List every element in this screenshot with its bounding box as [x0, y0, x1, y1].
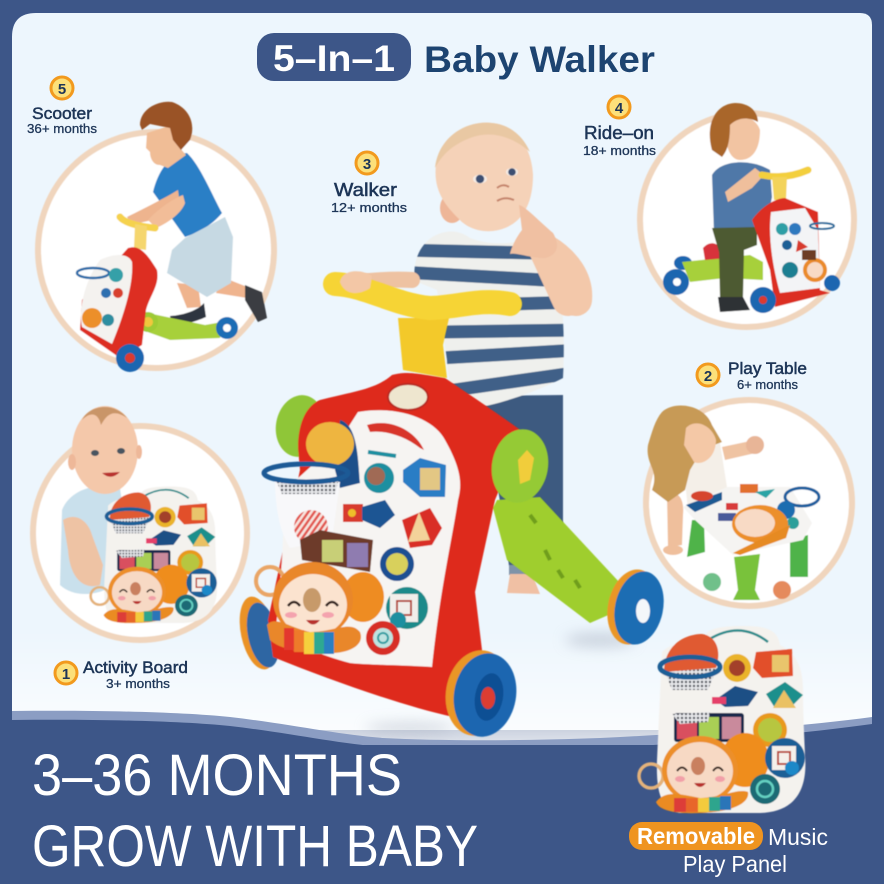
activity board age: 3+ months: [106, 676, 171, 691]
spiral wheel: [366, 621, 400, 655]
panel: activity board circle: [33, 406, 247, 640]
walker name: Walker: [334, 180, 397, 200]
left green cylinder: [271, 391, 329, 461]
floor highlight: [12, 630, 872, 745]
helicopter toy: [364, 452, 396, 493]
monkey head: [273, 562, 353, 638]
activity board baby: [60, 406, 142, 594]
headline line two: GROW WITH BABY: [32, 814, 478, 879]
panel: ride-on circle: [640, 103, 854, 327]
badge 2: 2: [704, 368, 712, 385]
ride-on name: Ride–on: [584, 123, 654, 143]
ring: [33, 426, 247, 640]
scooter age: 36+ months: [27, 121, 98, 136]
soft shadows under walker: [365, 633, 635, 733]
step 1 label: [55, 658, 188, 691]
ride-on child: [710, 103, 772, 312]
scooter name: Scooter: [32, 104, 92, 123]
headline line one: 3–36 MONTHS: [32, 743, 402, 808]
white play panel: [276, 410, 460, 667]
ride-on age: 18+ months: [583, 143, 657, 158]
title pill: 5–In–1: [273, 38, 395, 79]
monkey ear: [342, 572, 384, 622]
right green joint: [486, 425, 554, 507]
baby: main child: [352, 123, 580, 594]
ring: [38, 132, 274, 368]
removable word: Removable: [637, 823, 755, 849]
hand at mouth: [510, 205, 557, 258]
removable play panel: [639, 626, 805, 813]
scooter child: [127, 102, 267, 326]
badge 5: 5: [58, 81, 66, 98]
step 4 label: [583, 96, 657, 158]
right wheel: [601, 565, 670, 649]
orange pill: [629, 822, 763, 850]
jeans: [466, 395, 563, 575]
eyes: [473, 168, 518, 184]
leg grooves: [530, 515, 580, 588]
ring: [640, 113, 854, 327]
play table name: Play Table: [728, 359, 807, 378]
ride-on toy front: [750, 170, 840, 313]
triangle toy: [402, 508, 442, 548]
title text: Baby Walker: [424, 39, 655, 80]
front wheel: [439, 645, 523, 742]
logo badge: [388, 384, 428, 410]
wave band: [0, 711, 884, 884]
panel arch slot: [367, 423, 424, 450]
maze wheel: [386, 587, 428, 629]
badge 4: 4: [615, 100, 624, 117]
play table child: [648, 406, 764, 555]
gear: [380, 547, 414, 581]
play table toy: [683, 484, 819, 600]
ride-on toy rear: [663, 243, 763, 295]
step 2 label: [697, 359, 807, 392]
panel: play table circle: [646, 400, 852, 606]
basket and ball dome: [264, 420, 360, 548]
camera toy: [403, 458, 446, 497]
title pill: [257, 33, 411, 81]
sock cuff: [509, 565, 539, 575]
front arm: [545, 250, 576, 300]
title: [257, 33, 655, 81]
handle stem: [398, 318, 449, 378]
card block: [300, 530, 373, 572]
green leg: [493, 497, 620, 623]
walker: main toy: [234, 271, 670, 742]
scooter toy: [77, 217, 238, 372]
ring: [646, 400, 852, 606]
nose and mouth: [497, 185, 514, 201]
ear: [440, 193, 464, 223]
step 3 label: [331, 152, 408, 215]
foot: [507, 574, 540, 594]
shirt: [414, 232, 564, 409]
play panel words: Play Panel: [683, 851, 787, 877]
panel: scooter circle: [38, 102, 274, 372]
left rear wheel: [234, 593, 285, 673]
play table age: 6+ months: [737, 377, 798, 392]
back arm: [352, 280, 412, 283]
walker age: 12+ months: [331, 200, 408, 215]
mini activity board: [91, 486, 217, 623]
fingers on handle: [340, 271, 372, 293]
step 5 label: [27, 77, 98, 136]
piano keyboard: [267, 621, 361, 654]
abacus and rocket: [343, 500, 395, 528]
badge 1: 1: [62, 666, 70, 683]
head: [436, 123, 533, 231]
removable caption: [629, 822, 828, 877]
light panel: [12, 13, 872, 730]
monkey ring: [256, 567, 284, 595]
headline: [32, 743, 478, 879]
activity board name: Activity Board: [83, 658, 188, 677]
badge 3: 3: [363, 156, 371, 173]
music word: Music: [768, 824, 828, 850]
shirt stripes: [414, 244, 564, 395]
hair: [435, 123, 530, 168]
handle bar: [335, 284, 510, 308]
ball: [294, 510, 328, 544]
red frame: [268, 373, 523, 717]
